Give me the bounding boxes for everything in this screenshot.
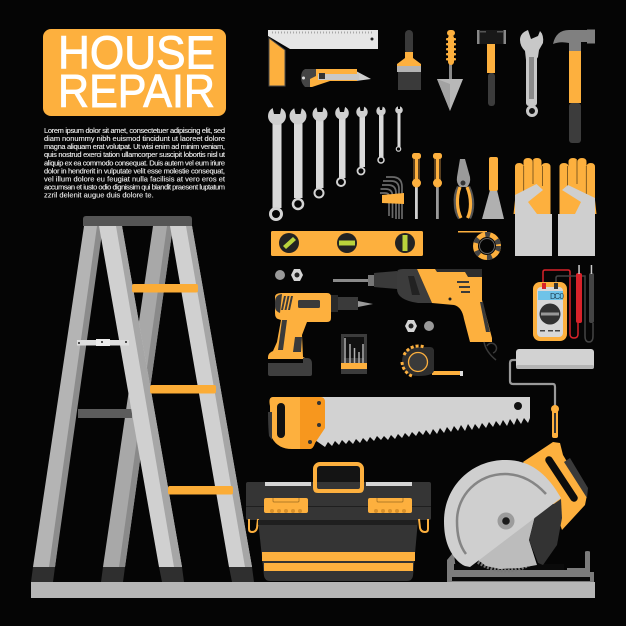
icon: multimeter: DC 0 (550, 292, 565, 301)
icon: hammer drill (333, 269, 496, 360)
floor shelf (31, 582, 595, 598)
saw hub (498, 512, 514, 530)
icon: putty scraper (482, 157, 504, 219)
wrench 4 (335, 105, 349, 186)
body text: Lorem ipsum dolor sit amet, consectetuer adipiscing elit, sed (44, 126, 225, 135)
icon: screwdriver 2 (433, 153, 442, 219)
ladder rear legs (33, 226, 173, 567)
left glove (514, 158, 552, 256)
icon: hand saw (268, 397, 530, 449)
toolbox body (258, 520, 418, 581)
meter leads (543, 270, 593, 342)
title banner: REPAIR (58, 65, 215, 117)
ladder steps (132, 284, 233, 494)
toolbox stripes (262, 552, 415, 571)
icon: circular saw (444, 442, 594, 582)
icon: pliers (456, 159, 472, 218)
saw handle (523, 442, 588, 530)
body text: zzril delenit augue duis dolore te. (44, 191, 154, 200)
saw guard ring (457, 474, 546, 554)
body text: magna aliquam erat volutpat. Ut wisi enim ad minim veniam, (44, 142, 225, 151)
ladder front legs (99, 226, 252, 567)
body text (44, 126, 226, 200)
right glove (558, 158, 596, 256)
body text: diam nonummy nibh euismod tincidunt ut laoreet dolore (44, 134, 225, 143)
icon: carpenter square (268, 30, 378, 86)
icon: claw hammer (553, 30, 595, 143)
icon: trowel (437, 30, 463, 111)
icon: drill bit set (341, 334, 367, 374)
saw upper guard (444, 460, 561, 567)
wrench 6 (376, 105, 386, 163)
drill cord (484, 342, 496, 360)
body text: aliquip ex ea commodo consequat. Duis autem vel eum iriure (44, 158, 225, 167)
ladder top cap (83, 216, 192, 226)
wrench 2 (290, 105, 306, 209)
step ladder (31, 216, 254, 582)
icon: work gloves (514, 158, 596, 256)
icon: paint brush (397, 30, 421, 90)
body text: dolor in hendrerit in vulputate velit esse molestie consequat, (44, 166, 225, 175)
toolbox hooks (249, 519, 428, 532)
icon: adjustable wrench (520, 30, 543, 116)
ladder feet (31, 567, 254, 582)
saw lower guard (529, 499, 562, 565)
icon: multimeter (533, 265, 594, 342)
icon: screwdriver 1 (412, 153, 421, 219)
toolbox lid (246, 482, 431, 520)
icon: screw and nut top (275, 269, 303, 281)
saw base (447, 551, 594, 582)
icon: hex keys (380, 177, 404, 219)
icon: spirit level (271, 231, 423, 256)
icon: paint roller (510, 349, 594, 438)
title banner (43, 26, 226, 117)
body text: vel illum dolore eu feugiat nulla facilisis at vero eros et (44, 174, 226, 184)
icon: nut and screw middle (405, 320, 434, 332)
wrench 3 (312, 105, 328, 198)
wrench 5 (356, 105, 368, 174)
icon: mallet (477, 30, 506, 106)
ladder cross bar (78, 409, 132, 418)
wrench 1 (268, 105, 286, 220)
icon: cordless drill (268, 293, 373, 376)
icon: tape roll (458, 231, 498, 258)
icon: utility knife (301, 69, 371, 87)
wrench 7 (395, 105, 403, 151)
wrench set (268, 105, 403, 220)
meter probes (576, 265, 594, 323)
toolbox latches (264, 498, 412, 513)
ladder hinge (77, 339, 129, 346)
body text: accumsan et iusto odio dignissim qui blandit praesent luptatum (44, 183, 225, 192)
toolbox (246, 464, 431, 581)
title banner: HOUSE (58, 26, 215, 78)
saw blade (478, 516, 537, 571)
body text: quis nostrud exerci tation ullamcorper suscipit lobortis nisl ut (44, 150, 226, 159)
drill body (397, 269, 432, 303)
drill bit (333, 271, 397, 289)
icon: tape measure (402, 346, 463, 376)
toolbox handle (315, 464, 362, 491)
